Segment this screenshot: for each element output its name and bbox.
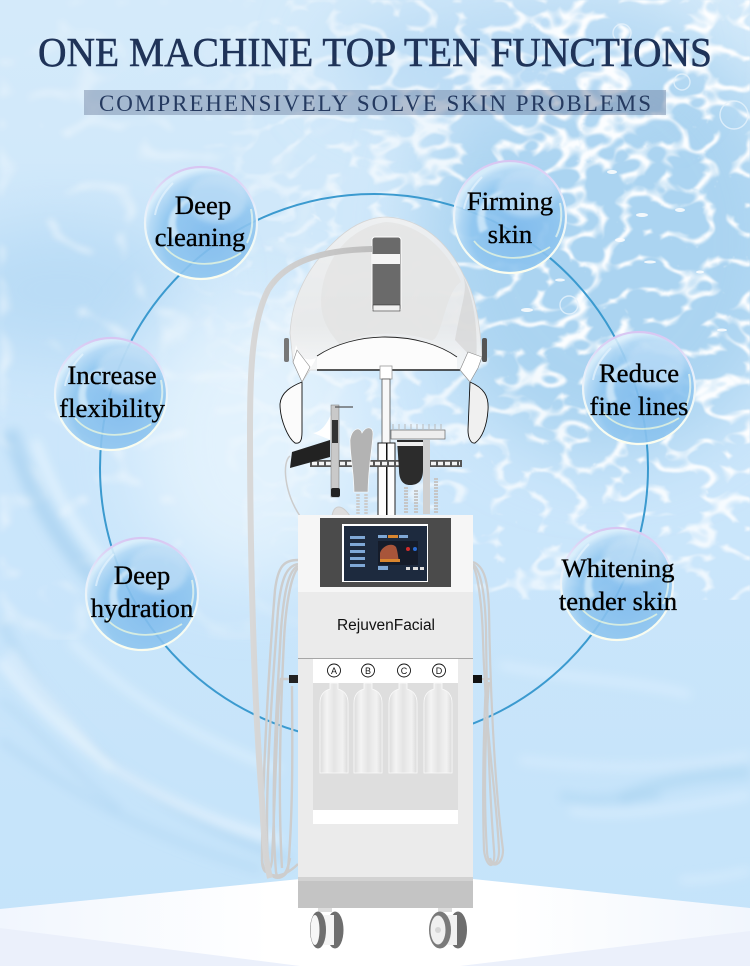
bottle labels <box>328 664 446 677</box>
right connector <box>473 675 482 683</box>
bubble: whitening tender skin: Whitening <box>561 553 675 583</box>
machine <box>250 217 503 948</box>
bubble: whitening tender skin: tender skin <box>559 586 677 616</box>
helmet left flap <box>280 382 302 443</box>
bubble: deep hydration: hydration <box>91 593 193 623</box>
floor <box>0 879 750 966</box>
console base <box>298 877 473 908</box>
side tubes right <box>473 562 503 865</box>
bubble: increase flexibility <box>54 338 168 450</box>
bubble: deep hydration: Deep <box>114 560 170 590</box>
subtitle band: COMPREHENSIVELY SOLVE SKIN PROBLEMS <box>99 91 651 116</box>
bubble: firming skin: Firming <box>467 186 553 216</box>
bottle labels: D <box>436 666 443 676</box>
screen bezel <box>320 518 451 587</box>
helmet right flap <box>468 382 488 443</box>
bubble: firming skin: skin <box>488 219 532 249</box>
bubble: whitening tender skin <box>559 528 677 640</box>
bottle labels: C <box>401 666 408 676</box>
bubble: reduce fine lines <box>582 332 696 444</box>
helmet dome <box>280 217 488 443</box>
bubble: reduce fine lines: fine lines <box>590 391 688 421</box>
side tubes left <box>262 560 298 878</box>
bubble: reduce fine lines: Reduce <box>599 358 679 388</box>
pole <box>378 366 395 517</box>
left connector <box>289 675 298 683</box>
wheels <box>310 908 467 948</box>
bubble: firming skin <box>454 160 566 274</box>
helmet side knobs <box>284 338 289 362</box>
bottles <box>320 683 452 773</box>
bubble: increase flexibility: flexibility <box>59 393 165 423</box>
console body <box>298 515 473 878</box>
helmet top grey module <box>372 237 401 311</box>
bubble: deep cleaning <box>144 166 258 280</box>
bubble: deep hydration <box>86 538 198 650</box>
main hose <box>250 249 372 878</box>
right ripple streaks <box>500 665 750 880</box>
bubble: deep cleaning: Deep <box>175 190 231 220</box>
hand tools and holder <box>285 405 462 516</box>
bottle labels: A <box>331 666 337 676</box>
title: ONE MACHINE TOP TEN FUNCTIONS <box>38 29 712 75</box>
bubble: increase flexibility: Increase <box>67 360 157 390</box>
bottle labels: B <box>365 666 371 676</box>
brand name: RejuvenFacial <box>337 617 435 634</box>
bright reflections and water rings <box>521 170 727 332</box>
bottle bay <box>313 659 458 824</box>
connecting circle <box>100 194 648 742</box>
left ripple arcs <box>0 430 290 870</box>
touch screen <box>342 524 428 582</box>
bubble: deep cleaning: cleaning <box>155 222 245 252</box>
